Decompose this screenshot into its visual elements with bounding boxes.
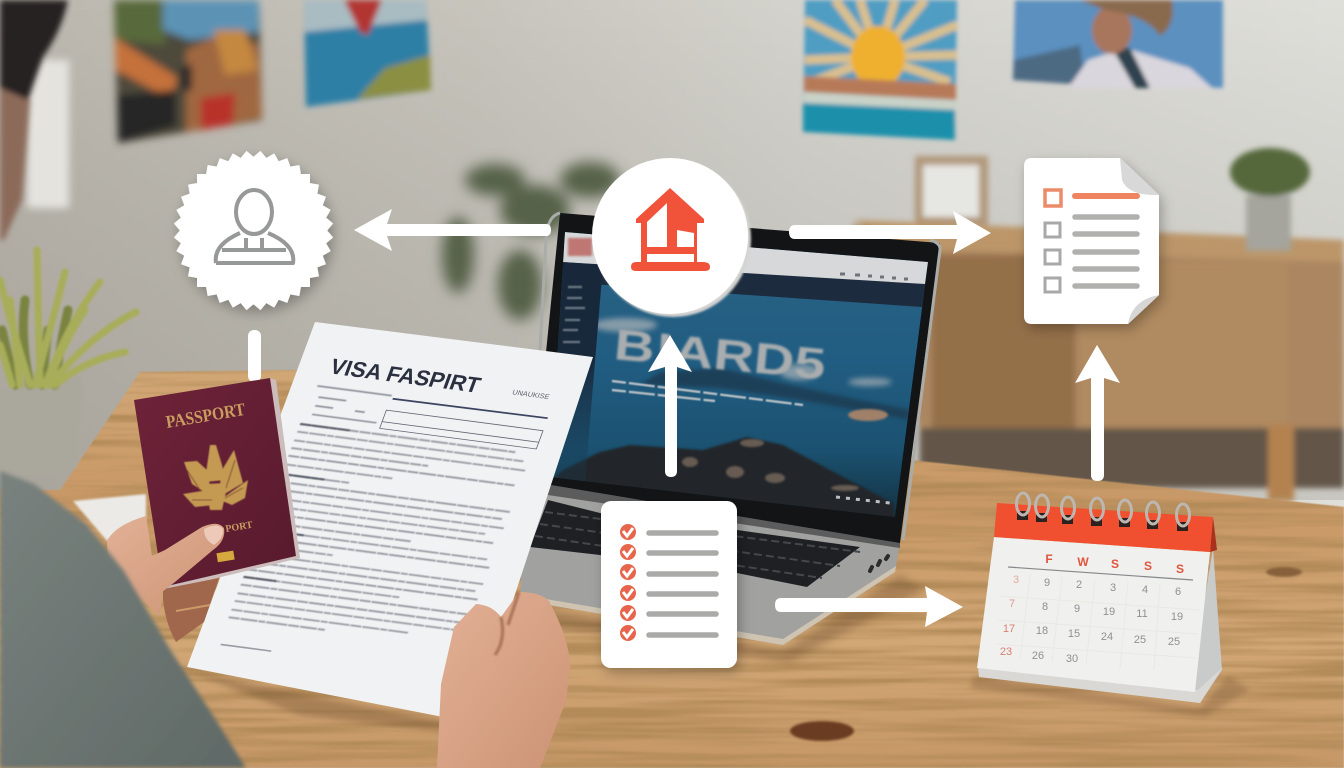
mountain range [550,437,895,522]
form labels [307,386,392,424]
arrow: checklist to calendar [775,586,963,627]
calendar dates: 19 [1103,606,1115,618]
calendar dates: 8 [1042,601,1048,613]
laptop [520,213,940,645]
weekday letters: S [1144,559,1152,573]
calendar red header [994,503,1213,552]
laptop side ports [870,556,888,571]
wooden table top [0,360,1344,768]
browser logo [568,238,592,256]
passport chip [216,551,235,562]
calendar contact shadow [970,676,1250,716]
fingers below passport [163,578,219,642]
finger shadow [495,592,519,655]
calendar stand [1190,548,1222,703]
title rule [393,398,548,419]
laptop screen [554,232,928,517]
paper content [219,353,560,675]
passport [134,378,300,590]
calendar dates: 24 [1101,631,1113,643]
highlighted line [1075,193,1137,199]
dark nav bar [563,262,925,307]
calendar dates: 25 [1168,636,1180,648]
calendar dates [1000,574,1183,665]
keyboard [530,500,860,587]
back wall picture frame [915,156,988,228]
bottom page curl [1128,295,1159,324]
calendar dates: 7 [1009,598,1015,610]
distant coastline [640,368,910,420]
calendar dates: 3 [1110,582,1116,594]
checklist card [601,501,737,668]
weekday letters: S [1111,557,1119,571]
screen bottom toolbar dots [836,497,890,503]
visa document held in hand [187,322,593,735]
calendar dates: 3 [1013,574,1019,586]
house icon badge [592,158,751,317]
lid silver edge [533,213,940,540]
sidebar items [563,287,585,342]
calendar header rule [1008,567,1193,580]
paper sheet [187,322,593,717]
window on the left wall [27,60,69,208]
sidebar [556,262,602,481]
body text lines [229,424,531,648]
browser tab dots [840,274,908,279]
potted plant on the left [0,250,136,475]
arrow: checklist up to house [648,335,692,477]
desk calendar [977,493,1222,703]
check items [620,524,636,641]
calendar base [978,668,1222,703]
laptop base [520,480,900,645]
poster: sunrise [803,0,957,140]
arrow: house to profile [354,209,551,251]
passport title: PASSPORT [164,399,247,432]
second paper under left hand [73,494,146,541]
calendar dates: 17 [1003,623,1015,635]
poster: man in hat [1013,0,1223,88]
form box [380,410,543,449]
person's shirt, shoulder [0,471,246,768]
calendar dates: 2 [1076,579,1082,591]
laptop lid [533,213,940,543]
clouds [593,318,892,386]
calendar dates: 4 [1142,584,1148,596]
calendar dates: 6 [1175,586,1181,598]
arrow: calendar up to document [1075,345,1120,481]
wedding ring [176,605,210,611]
vertical connector stub below profile icon [248,330,261,382]
thumbnail [204,526,223,545]
highlighted checkbox [1045,190,1061,206]
weekday letters: W [1077,555,1089,569]
paper shadow [190,672,470,735]
arrow: house to document [789,211,991,254]
calendar dates: 9 [1044,577,1050,589]
weekday letters: S [1176,562,1184,576]
browser bar [562,232,928,284]
calendar faint grid [996,575,1200,670]
item lines [649,533,716,635]
calendar dates: 18 [1036,625,1048,637]
spiral rings [1016,493,1190,531]
small potted plant on sideboard [1230,148,1310,251]
document card with checkboxes [1024,158,1159,324]
top-right stamp text: UNAUKISE [511,389,551,401]
footer note [221,644,271,651]
gray checkboxes [1045,223,1060,292]
check marks [623,528,633,637]
passport lower text: PORT [225,520,254,535]
left hand holding passport [107,516,224,642]
wooden sideboard [852,220,1344,501]
profile badge: scalloped seal [174,151,333,310]
poster: coastline with red kite [304,0,431,107]
palm and thumb [107,516,224,616]
calendar dates: 25 [1134,634,1146,646]
sea shoreline town [848,409,888,421]
calendar dates: 9 [1074,603,1080,615]
calendar dates: 19 [1171,611,1183,623]
calendar dates: 23 [1000,646,1012,658]
gray lines [1075,217,1137,286]
background houseplant behind laptop [442,162,620,320]
person's hair and face [0,0,68,240]
laptop contact shadow [505,575,925,662]
calendar white page [977,537,1210,692]
weekday letters: F [1045,552,1053,566]
calendar red edge [1210,517,1217,552]
calendar dates: 30 [1066,653,1078,665]
icon: person [216,190,293,263]
calendar dates: 11 [1136,608,1148,620]
screen headline: B!ARD5 [612,320,828,389]
calendar dates: 26 [1032,650,1044,662]
top page curl [1120,158,1159,195]
weekday letters [1045,552,1184,576]
poster: travel collage [114,0,262,143]
calendar dates: 15 [1068,628,1080,640]
document title: VISA FASPIRT [327,354,484,398]
section headings [244,424,350,583]
right hand holding paper [437,592,570,768]
passport emblem [183,445,248,510]
icon: house [631,188,710,271]
screen subtitle lines [612,381,803,405]
